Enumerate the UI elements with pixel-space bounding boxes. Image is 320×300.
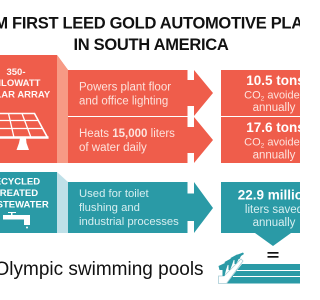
result: 22.9 million: annually: [253, 217, 296, 229]
solar array label: [0, 67, 51, 100]
icon: solar panel: [0, 114, 48, 150]
text: powers plant: and office lighting: [79, 96, 168, 108]
result: 10.5 tons: 2: [261, 96, 265, 102]
title: [0, 14, 320, 54]
row: heats water arrow: [68, 117, 213, 163]
icon: swimming pool: [218, 252, 300, 284]
text: heats water: of water daily: [79, 142, 147, 154]
text: powers plant: Powers plant floor: [79, 82, 171, 94]
text: toilet flushing: [79, 188, 179, 228]
result: 17.6 tons: CO: [244, 136, 261, 148]
row: powers plant arrow: [68, 70, 213, 116]
result: 22.9 million: [221, 182, 311, 246]
text: heats water: [79, 128, 175, 154]
text: toilet flushing: Used for toilet: [79, 188, 150, 200]
wastewater label: [0, 176, 49, 210]
text: toilet flushing: industrial processes: [79, 216, 179, 228]
result: 10.5 tons: [221, 70, 306, 116]
text: Olympic swimming pools: Olympic swimming pools: [0, 259, 204, 280]
result: 10.5 tons: annually: [253, 102, 296, 114]
panel: solar array: [0, 55, 68, 163]
result: 17.6 tons: [221, 117, 306, 163]
text: powers plant: [79, 82, 171, 108]
equals sign: [268, 252, 278, 258]
solar array label: 350-: [6, 67, 26, 78]
title: IN SOUTH AMERICA: [73, 36, 229, 54]
result: 17.6 tons: 2: [261, 142, 265, 150]
row: toilet flushing arrow: [68, 182, 213, 233]
panel: recycled wastewater: [0, 172, 68, 233]
text: toilet flushing: flushing and: [79, 202, 140, 214]
icon: faucet: [3, 212, 30, 228]
text: heats water: Heats 15,000 liters: [79, 128, 175, 140]
result: 17.6 tons: annually: [253, 150, 296, 162]
result: 10.5 tons: CO: [244, 90, 261, 102]
